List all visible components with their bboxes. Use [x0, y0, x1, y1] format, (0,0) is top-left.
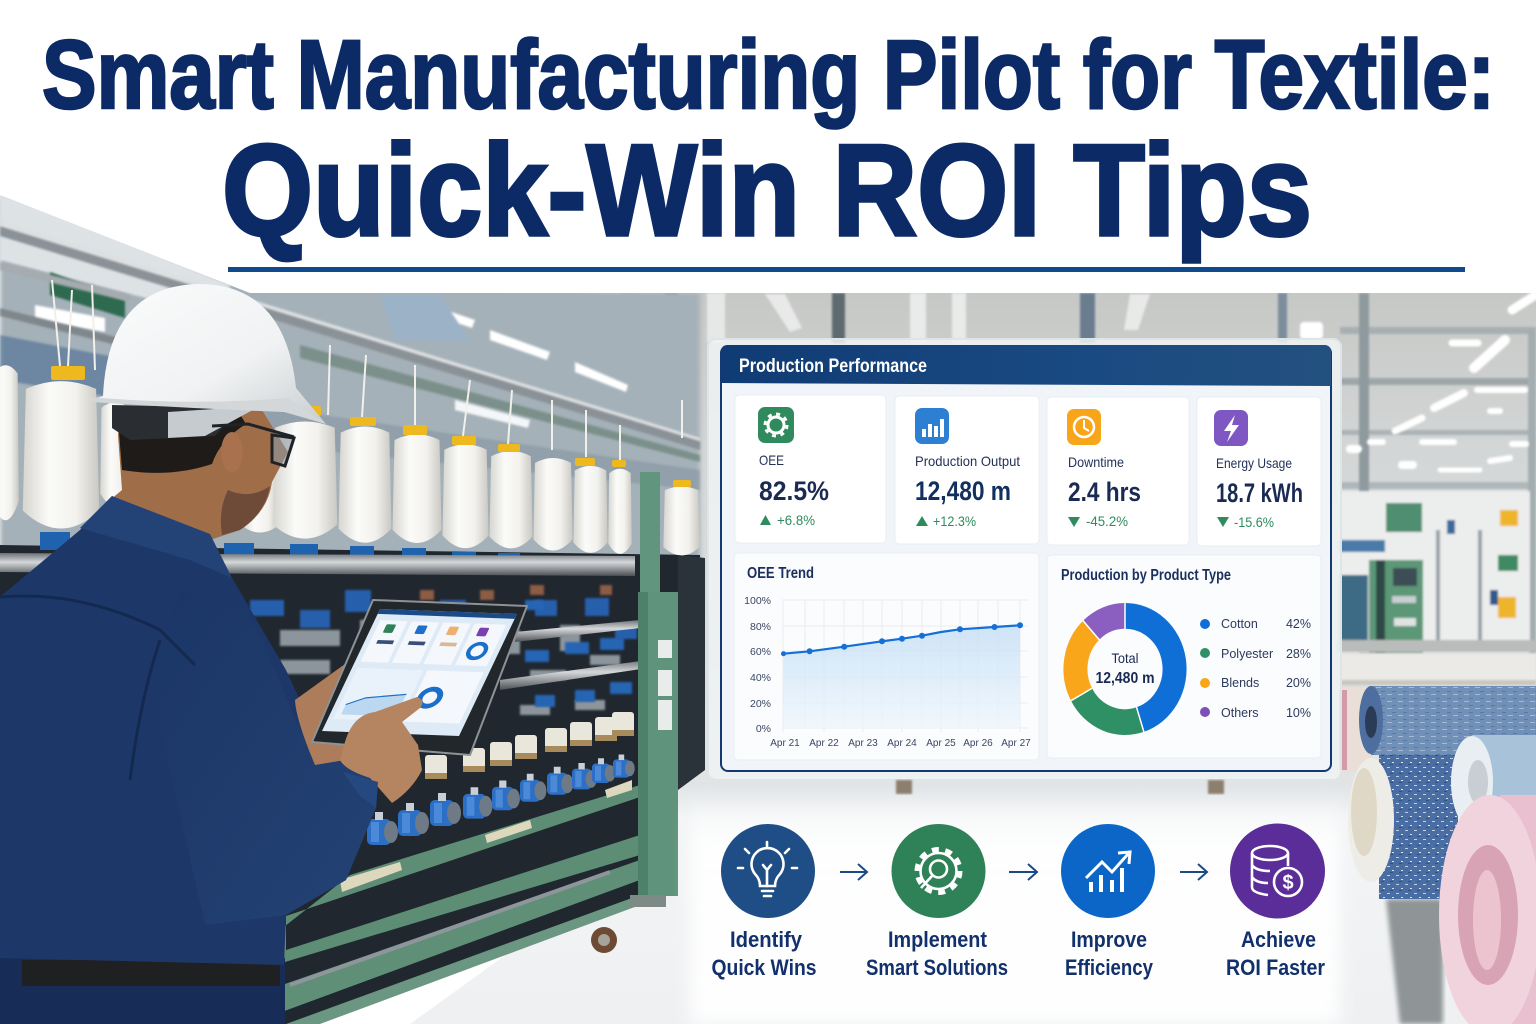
neck and head — [110, 410, 288, 540]
safety glasses — [212, 424, 294, 466]
trousers and belt — [0, 955, 285, 1024]
middle steel pipe — [500, 660, 648, 690]
legend: Blends — [1221, 676, 1259, 690]
step 4: achieve roi faster: Achieve — [1241, 927, 1316, 952]
legend — [1200, 617, 1311, 720]
yarn bobbins — [0, 365, 700, 555]
KPI card: Downtime: 2.4 hrs — [1068, 477, 1141, 507]
tablet frame — [312, 600, 527, 755]
KPI card: Production Output: Production Output — [915, 453, 1020, 469]
right sleeve — [150, 590, 378, 925]
step 4: achieve roi faster: $ — [1282, 872, 1294, 894]
x axis labels: Apr 26 — [963, 738, 993, 749]
suspension threads — [52, 280, 682, 460]
y axis labels: 0% — [756, 723, 771, 735]
factory hall wall and ceiling — [620, 293, 1536, 813]
dashboard title: Production Performance — [739, 356, 927, 377]
shirt collar — [80, 496, 232, 578]
helmet brim shade — [90, 397, 326, 424]
x axis labels — [770, 738, 1031, 749]
worker — [0, 284, 378, 1024]
spindle row upper — [250, 585, 637, 715]
yellow bobbin caps — [51, 366, 691, 487]
step 4: achieve roi faster — [1226, 824, 1325, 980]
legend: 20% — [1286, 676, 1311, 690]
y axis labels: 80% — [750, 621, 771, 633]
white header band — [0, 0, 1536, 293]
dashboard header — [721, 345, 1331, 386]
factory floor — [410, 782, 1536, 1024]
KPI card: OEE — [735, 395, 886, 543]
small cream cones row — [425, 712, 634, 779]
icon: gear — [758, 407, 794, 443]
pointing hand — [340, 697, 422, 803]
icon: gear with magnifier — [917, 850, 960, 892]
icon: bars — [915, 408, 949, 444]
shirt cuff — [343, 772, 378, 808]
bobbin row — [0, 365, 700, 555]
arrow 1 — [840, 864, 867, 880]
green machine rails — [280, 780, 640, 1024]
KPI card: Energy Usage: 18.7 kWh — [1216, 478, 1303, 508]
pink roll left — [1339, 688, 1372, 772]
KPI card: OEE: +6.8% — [777, 512, 815, 528]
legend: Others — [1221, 706, 1259, 720]
upper lights and cables — [0, 272, 700, 490]
OEE trend chart card — [734, 553, 1039, 760]
dashboard body — [721, 346, 1331, 771]
light glass roof pieces — [0, 195, 230, 320]
hair — [118, 408, 246, 473]
y axis labels — [744, 595, 771, 735]
OEE trend chart card: OEE Trend — [747, 565, 814, 582]
icon: light bulb — [738, 842, 797, 896]
ear — [221, 432, 243, 472]
step 1: identify quick wins — [712, 824, 816, 980]
y axis labels: 20% — [750, 698, 771, 710]
far machine section — [678, 555, 705, 790]
hard hat — [90, 284, 326, 440]
chart points — [781, 622, 1023, 656]
legend: 10% — [1286, 706, 1311, 720]
chart line — [784, 625, 1020, 654]
x axis labels: Apr 22 — [809, 738, 839, 749]
icon: clock — [1067, 409, 1101, 445]
distant machines right — [1336, 491, 1536, 653]
roll end white — [1348, 758, 1394, 882]
shirt body — [0, 496, 378, 965]
distant ceiling lights — [1350, 296, 1534, 470]
tablet screen — [322, 609, 517, 736]
step 2: implement smart solutions: Smart Solutions — [866, 955, 1008, 980]
helmet dome and brim — [90, 284, 326, 424]
white rolls back row — [1340, 654, 1536, 685]
chart gridlines — [782, 600, 1028, 732]
KPI card: OEE: OEE — [759, 452, 784, 468]
upper-middle steel pipe — [515, 620, 640, 642]
title line two: Quick-Win ROI Tips — [222, 117, 1312, 263]
fabric rolls — [1339, 654, 1536, 1024]
ceiling columns and beams — [665, 293, 1536, 653]
title underline — [228, 267, 1465, 272]
spindle row middle — [525, 600, 632, 707]
pink roll foreground — [1439, 795, 1536, 1024]
blue patterned roll — [1348, 755, 1458, 899]
icon: lightning bolt — [1214, 410, 1248, 446]
step 4: achieve roi faster: ROI Faster — [1226, 955, 1325, 980]
arrow 3 — [1180, 864, 1207, 880]
green machine post — [630, 472, 678, 907]
production by product type card — [1047, 555, 1321, 758]
overhead rail — [0, 222, 700, 450]
step 3: improve efficiency — [1061, 824, 1155, 980]
donut total: Total — [1112, 650, 1138, 666]
x axis labels: Apr 23 — [848, 738, 878, 749]
x axis labels: Apr 24 — [887, 738, 917, 749]
icon: growth chart — [1086, 852, 1130, 892]
helmet strap — [112, 405, 240, 440]
floor reflection under rolls — [1386, 899, 1443, 1024]
legend: 42% — [1286, 617, 1311, 631]
arrow 2 — [1009, 864, 1037, 880]
helmet side band — [168, 406, 260, 438]
legend: Polyester — [1221, 647, 1273, 661]
KPI card: Downtime — [1047, 397, 1189, 545]
left hand behind tablet — [295, 664, 345, 765]
x axis labels: Apr 25 — [926, 738, 956, 749]
step 2: implement smart solutions — [866, 824, 1008, 980]
production by product type card: Production by Product Type — [1061, 567, 1231, 584]
factory background photo — [410, 293, 1536, 1024]
process flow — [712, 824, 1325, 980]
KPI card: Downtime: Downtime — [1068, 454, 1124, 470]
KPI card: OEE: 82.5% — [759, 476, 829, 506]
KPI card: Energy Usage: Energy Usage — [1216, 455, 1292, 471]
blue bobbin cups — [40, 532, 595, 567]
white fade behind process row — [690, 795, 1340, 1024]
legend: Cotton — [1221, 617, 1258, 631]
dashboard panel — [708, 339, 1341, 780]
shirt seam — [0, 596, 195, 780]
x axis labels: Apr 27 — [1001, 738, 1031, 749]
legend: 28% — [1286, 647, 1311, 661]
step 1: identify quick wins: Quick Wins — [712, 955, 816, 980]
KPI card: Production Output: 12,480 m — [915, 476, 1011, 506]
icon: coins and dollar — [1252, 846, 1302, 896]
step 1: identify quick wins: Identify — [730, 927, 803, 952]
machine upper backdrop — [0, 195, 700, 560]
step 3: improve efficiency: Efficiency — [1065, 955, 1154, 980]
step 2: implement smart solutions: Implement — [888, 927, 988, 952]
x axis labels: Apr 21 — [770, 738, 800, 749]
KPI card: Energy Usage: -15.6% — [1234, 514, 1274, 530]
step 3: improve efficiency: Improve — [1071, 927, 1147, 952]
textile machine — [0, 195, 705, 1024]
tablet — [312, 600, 527, 808]
donut total — [1096, 650, 1154, 687]
KPI card: Energy Usage — [1197, 397, 1321, 546]
dashboard stand feet — [896, 780, 1224, 794]
y axis labels: 60% — [750, 646, 771, 658]
blue roll horizontal — [1359, 686, 1536, 755]
title — [42, 20, 1495, 263]
KPI card: Downtime: -45.2% — [1086, 513, 1128, 529]
stubble on jaw — [221, 486, 270, 535]
machinery dark base — [0, 545, 700, 1024]
horizontal steel pipe — [0, 553, 635, 576]
y axis labels: 40% — [750, 672, 771, 684]
glass frame — [708, 339, 1341, 780]
donut chart — [1071, 602, 1175, 732]
blue spindle motors — [367, 754, 635, 845]
y axis labels: 100% — [744, 595, 771, 607]
light blue roll right — [1451, 735, 1536, 830]
KPI card: Production Output — [895, 396, 1039, 544]
donut total: 12,480 m — [1096, 670, 1154, 687]
chart area fill — [784, 625, 1020, 728]
KPI card: Production Output: +12.3% — [933, 513, 976, 529]
